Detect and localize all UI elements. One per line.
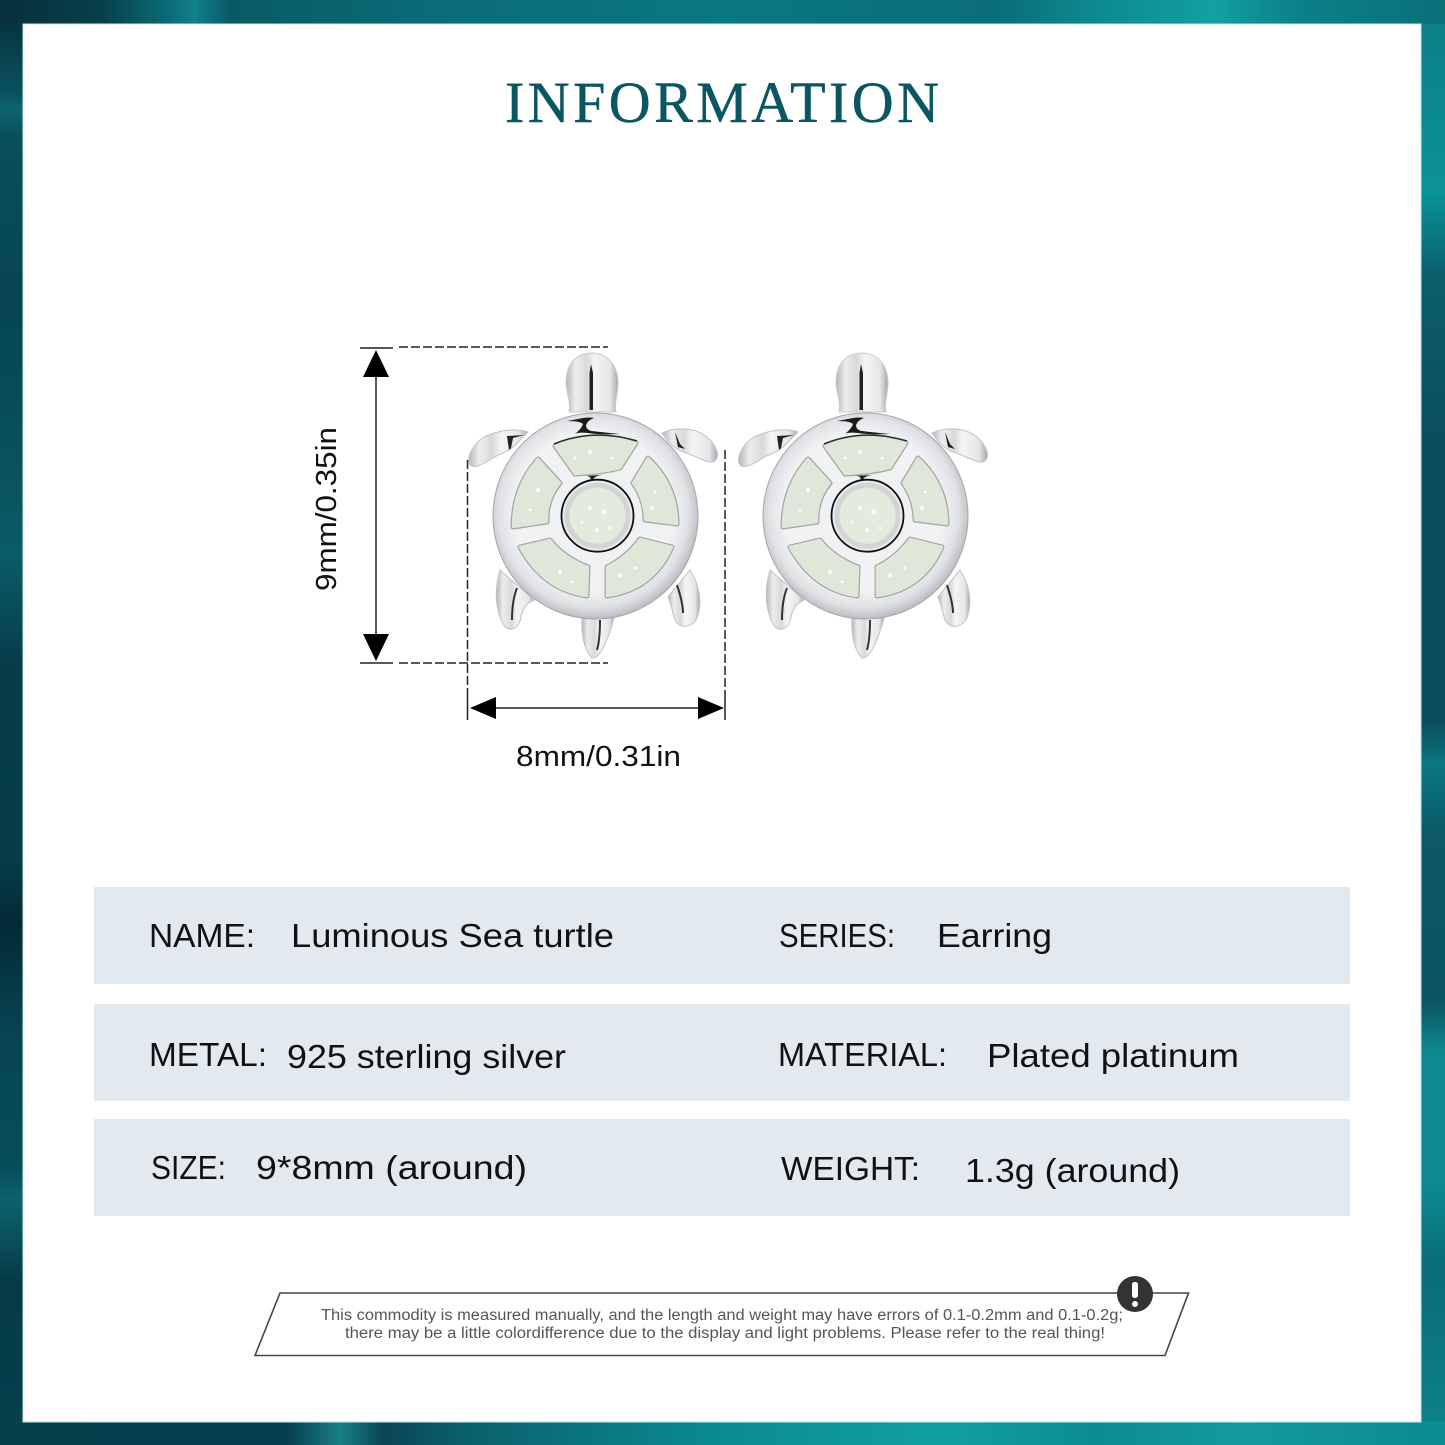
spec row: metal and material: METAL: xyxy=(149,1036,267,1073)
spec row: name and series: NAME: xyxy=(149,917,255,954)
spec row: name and series: Earring xyxy=(937,917,1052,954)
title: INFORMATION xyxy=(505,70,939,135)
spec row: metal and material xyxy=(94,1004,1350,1101)
disclaimer box: there may be a little colordifference due to the display and light problems. Please refer to the real thing! xyxy=(345,1325,1105,1342)
height label: 9mm/0.35in xyxy=(311,427,343,591)
product image: left turtle earring xyxy=(469,353,718,658)
height dimension arrow xyxy=(360,347,608,663)
icon: warning exclamation xyxy=(1117,1276,1153,1312)
spec row: metal and material: MATERIAL: xyxy=(778,1036,947,1073)
spec row: name and series: SERIES: xyxy=(779,917,895,954)
disclaimer box xyxy=(255,1293,1188,1356)
spec row: size and weight: SIZE: xyxy=(151,1149,226,1186)
spec row: size and weight: 1.3g (around) xyxy=(965,1152,1180,1189)
width dimension arrow xyxy=(468,450,725,720)
spec row: name and series xyxy=(94,887,1350,984)
width label: 8mm/0.31in xyxy=(516,741,681,773)
spec row: name and series: Luminous Sea turtle xyxy=(291,917,614,954)
spec row: size and weight: 9*8mm (around) xyxy=(256,1149,527,1186)
disclaimer box: This commodity is measured manually, and the length and weight may have errors of 0.1-0.2mm and 0.1-0.2g; xyxy=(321,1307,1123,1324)
spec row: size and weight: WEIGHT: xyxy=(781,1150,920,1187)
product image: right turtle earring xyxy=(739,353,988,658)
spec row: size and weight xyxy=(94,1119,1350,1216)
spec row: metal and material: Plated platinum xyxy=(987,1037,1239,1074)
spec row: metal and material: 925 sterling silver xyxy=(287,1038,566,1075)
